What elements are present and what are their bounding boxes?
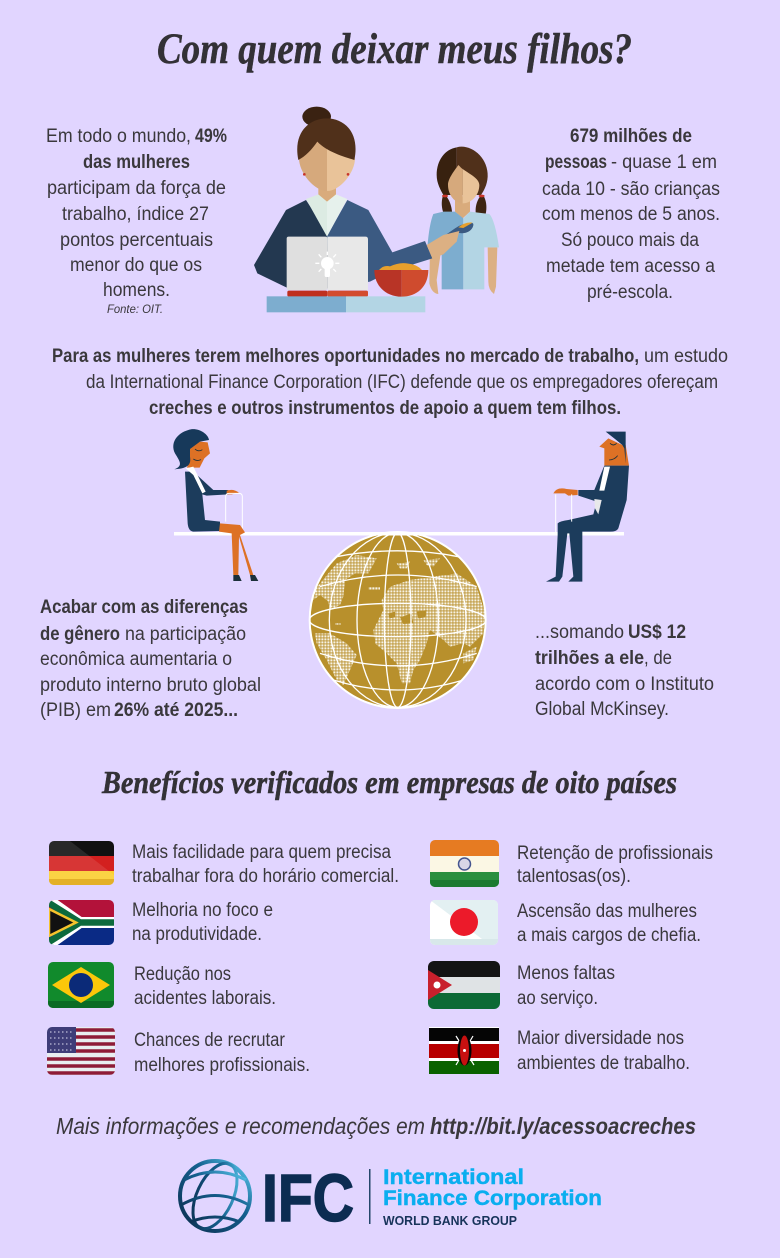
text: India benefit: talentosas(os). [517,866,631,887]
text block: women in the workforce: participam da força de [47,178,226,199]
text: Japan benefit [517,901,701,946]
text block: GDP left: 26% até 2025... [114,700,238,721]
icon: flag Japan [430,900,498,945]
text: South Africa benefit: Melhoria no foco e [132,900,273,921]
icon: flag Brazil [48,962,114,1008]
text block: IFC study: creches e outros instrumentos de apoio a quem tem filhos. [149,398,621,419]
text block: children under five: pessoas [545,152,607,173]
text block: women in the workforce: Em todo o mundo, [46,126,191,147]
illustration: mother and daughter [254,107,499,312]
text block: women in the workforce: menor do que os [70,255,202,276]
footer link text [56,1113,696,1139]
text block: GDP right: acordo com o Instituto [535,674,714,695]
text block: GDP right [535,622,714,720]
text: Japan benefit: Ascensão das mulheres [517,901,697,922]
icon: globe [309,532,486,708]
source note: Fonte: OIT. [107,302,163,316]
text block: women in the workforce: 49% [195,126,227,147]
logo wordmark: IFC [262,1161,354,1236]
title: Com quem deixar meus filhos? [157,26,632,73]
icon: seesaw bar [174,532,624,536]
text block: GDP left: na participação [125,624,246,645]
text block: GDP left: (PIB) em [40,700,111,721]
text: USA benefit: Chances de recrutar [134,1030,286,1051]
text block: GDP left: produto interno bruto global [40,675,261,696]
text block: GDP left: econômica aumentaria o [40,649,232,670]
icon: table [267,296,425,312]
text block: GDP left [40,597,261,721]
text block: children under five: 679 milhões de [570,126,692,147]
text block: GDP right: US$ 12 [628,622,686,643]
text block: IFC study: um estudo [644,346,728,367]
footer link text: Mais informações e recomendações em [56,1113,425,1139]
text: Germany benefit: Mais facilidade para quem precisa [132,842,391,863]
text block: children under five: com menos de 5 anos. [542,204,720,225]
icon: globe logo [180,1157,250,1235]
text: Brazil benefit [134,964,276,1009]
icon: man sitting [546,432,629,582]
text: Jordan benefit: ao serviço. [517,988,598,1009]
icon: woman sitting [173,429,258,581]
text block: children under five: Só pouco mais da [561,230,699,251]
text: USA benefit [134,1030,310,1076]
text block: children under five: pré-escola. [587,282,673,303]
text block: GDP right: trilhões a ele [535,648,644,669]
text block: GDP right: Global McKinsey. [535,699,669,720]
logo name [383,1166,602,1228]
logo name: WORLD BANK GROUP [383,1214,517,1228]
text block: GDP left: de gênero [40,624,120,645]
text block: IFC study [52,346,728,419]
text: India benefit: Retenção de profissionais [517,843,713,864]
heading: benefits: Benefícios verificados em empresas de oito países [101,764,677,800]
illustration: balance on globe [173,429,629,708]
text block: children under five [542,126,720,303]
icon: mother [254,107,459,288]
text block: women in the workforce: trabalho, índice 27 [62,204,209,225]
text block: women in the workforce: pontos percentuais [60,230,213,251]
logo name: Finance Corporation [383,1187,602,1210]
icon: flag Jordan [428,961,500,1009]
icon: bowl of food [374,263,428,297]
text block: women in the workforce: homens. [103,280,170,301]
text: South Africa benefit: na produtividade. [132,924,262,945]
text block: women in the workforce [46,126,227,301]
text: Brazil benefit: Redução nos [134,964,231,985]
footer link text: http://bit.ly/acessoacreches [430,1113,696,1139]
text: Kenya benefit [517,1028,690,1074]
text block: GDP right: ...somando [535,622,624,643]
text: Jordan benefit: Menos faltas [517,963,615,984]
text: USA benefit: melhores profissionais. [134,1055,310,1076]
logo name: International [383,1166,524,1189]
text: Jordan benefit [517,963,615,1009]
icon: laptop [287,237,368,297]
text: Kenya benefit: Maior diversidade nos [517,1028,684,1049]
logo divider [369,1169,370,1224]
text: Kenya benefit: ambientes de trabalho. [517,1053,690,1074]
text block: children under five: cada 10 - são crianças [542,179,720,200]
text: South Africa benefit [132,900,273,945]
text block: children under five: metade tem acesso a [546,256,715,277]
icon: flag India [430,840,499,887]
text block: IFC study: Para as mulheres terem melhores oportunidades no mercado de trabalho, [52,346,639,367]
text: Germany benefit [132,842,399,887]
icon: flag USA [47,1027,115,1075]
icon: daughter [427,147,499,294]
text: India benefit [517,843,713,887]
text block: children under five: - quase 1 em [611,152,717,173]
text block: GDP right: , de [644,648,672,669]
text: Germany benefit: trabalhar fora do horário comercial. [132,866,399,887]
icon: flag Germany [49,841,114,885]
text: Japan benefit: a mais cargos de chefia. [517,925,701,946]
text block: GDP left: Acabar com as diferenças [40,597,248,618]
text block: women in the workforce: das mulheres [83,152,190,173]
text block: IFC study: da International Finance Corporation (IFC) defende que os empregadores ofereçam [86,372,718,393]
icon: flag South Africa [49,900,114,945]
icon: flag Kenya [429,1027,499,1074]
text: Brazil benefit: acidentes laborais. [134,988,276,1009]
logo: IFC [180,1157,602,1236]
